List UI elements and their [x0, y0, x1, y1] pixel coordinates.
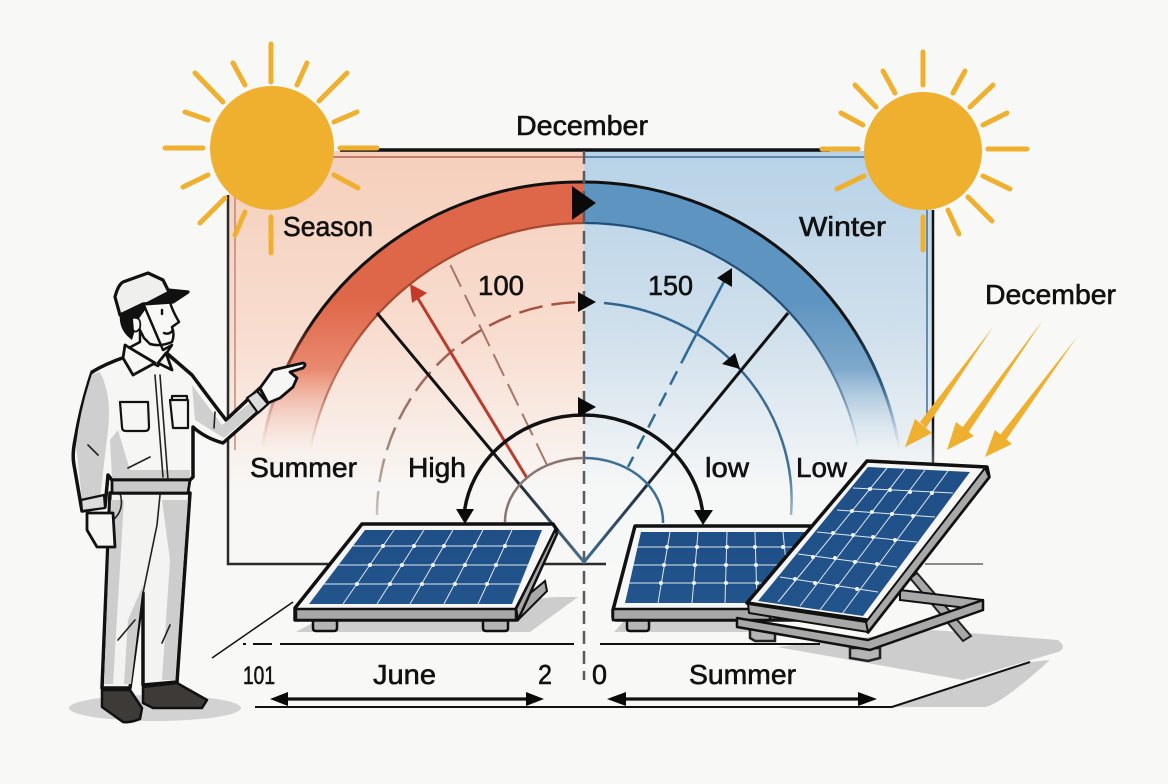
trousers: [102, 493, 190, 688]
center dashed axis: [583, 151, 585, 680]
label: December sun rays: December: [985, 279, 1116, 310]
label: June: June: [373, 659, 436, 690]
cuffs: [81, 391, 268, 511]
panel frame: [295, 524, 557, 620]
panel cells: [625, 532, 810, 603]
label: Season: Season: [283, 211, 373, 242]
neck and face: [125, 302, 179, 366]
arrow: middle arc right marker: [722, 353, 740, 369]
panel back struts: [910, 573, 971, 641]
shoes: [102, 683, 207, 722]
panel feet: [627, 619, 649, 631]
arrows: incoming December sun rays: [905, 320, 1077, 457]
jacket body: [73, 350, 268, 511]
panel cell grid: [629, 532, 810, 603]
panel cells: [758, 467, 970, 616]
arrow: black angle arc: [456, 397, 713, 525]
solar panel: mid tilt: [613, 526, 810, 631]
label: Summer: Summer: [250, 452, 357, 483]
left hand: [87, 513, 115, 547]
arrow: blue low sun ray: [628, 268, 732, 467]
arrow: June dimension: [270, 692, 544, 706]
panel frame: [613, 526, 810, 620]
heading: December: December: [516, 110, 648, 141]
label: 150: 150: [648, 270, 693, 301]
panel cell nodes: [661, 547, 783, 583]
panel frame edge: [296, 530, 557, 620]
panel cell nodes: [795, 489, 932, 589]
label: 2: 2: [538, 659, 552, 690]
chart: blue winter arc band: [584, 182, 899, 447]
icon: winter sun: [822, 52, 1027, 250]
label: Winter: Winter: [799, 211, 886, 242]
chart: right incidence line: [584, 313, 788, 562]
panel cells: [309, 530, 542, 604]
label: 101: 101: [243, 662, 275, 690]
ground lines: [212, 602, 1030, 707]
person: worker pointing at chart: [69, 273, 305, 722]
chart: middle dashed arc: [377, 302, 584, 515]
pointing hand: [260, 363, 305, 403]
label: low: low: [705, 452, 749, 483]
chart: left incidence line: [377, 313, 584, 562]
solar panel: summer low tilt: [295, 524, 557, 631]
panel base back rail: [900, 590, 983, 610]
panel cell grid: [778, 468, 953, 614]
panel feet: [313, 619, 508, 631]
arrow: middle arc top marker: [578, 292, 596, 312]
cap: [115, 273, 188, 315]
ground shadows under panels: [296, 597, 1063, 707]
chart: middle blue arc: [604, 303, 792, 515]
panel frame edge: [613, 609, 770, 620]
arrow: Summer dimension: [607, 692, 877, 706]
panel frame edges: [748, 468, 989, 632]
panel rear stand: [516, 581, 547, 620]
arrow: arc top marker: [572, 186, 596, 220]
trouser shading: [104, 500, 188, 684]
label: 100: 100: [478, 270, 524, 301]
cap visor: [143, 291, 188, 304]
panel frame: [747, 461, 989, 632]
arrow: red high sun ray: [410, 284, 527, 478]
hair: [120, 303, 145, 340]
belt: [112, 480, 190, 493]
jacket front placket: [88, 375, 215, 480]
panel cell nodes: [357, 546, 505, 584]
label: 0: 0: [592, 659, 607, 690]
brown dashed ray: [448, 260, 547, 465]
solar panel: winter steep tilt: [737, 461, 989, 661]
chart: small inner arc: [505, 458, 663, 523]
panel base rails: [737, 600, 983, 650]
label: Low: Low: [796, 452, 847, 483]
eye and mouth: [162, 310, 172, 334]
chart: red summer arc band: [262, 182, 584, 447]
panel cell grid: [324, 530, 536, 604]
label: Summer bottom: Summer: [689, 659, 796, 690]
label: High: High: [408, 452, 466, 483]
jacket shading: [76, 372, 263, 500]
trouser seams: [113, 493, 170, 643]
panel: seasonal sun path board: [228, 150, 983, 564]
ground shadow: [69, 695, 241, 721]
jacket pockets: [120, 396, 188, 431]
ear: [132, 318, 140, 332]
collar: [123, 345, 172, 375]
icon: summer sun: [165, 44, 377, 253]
panel base feet: [750, 628, 880, 661]
